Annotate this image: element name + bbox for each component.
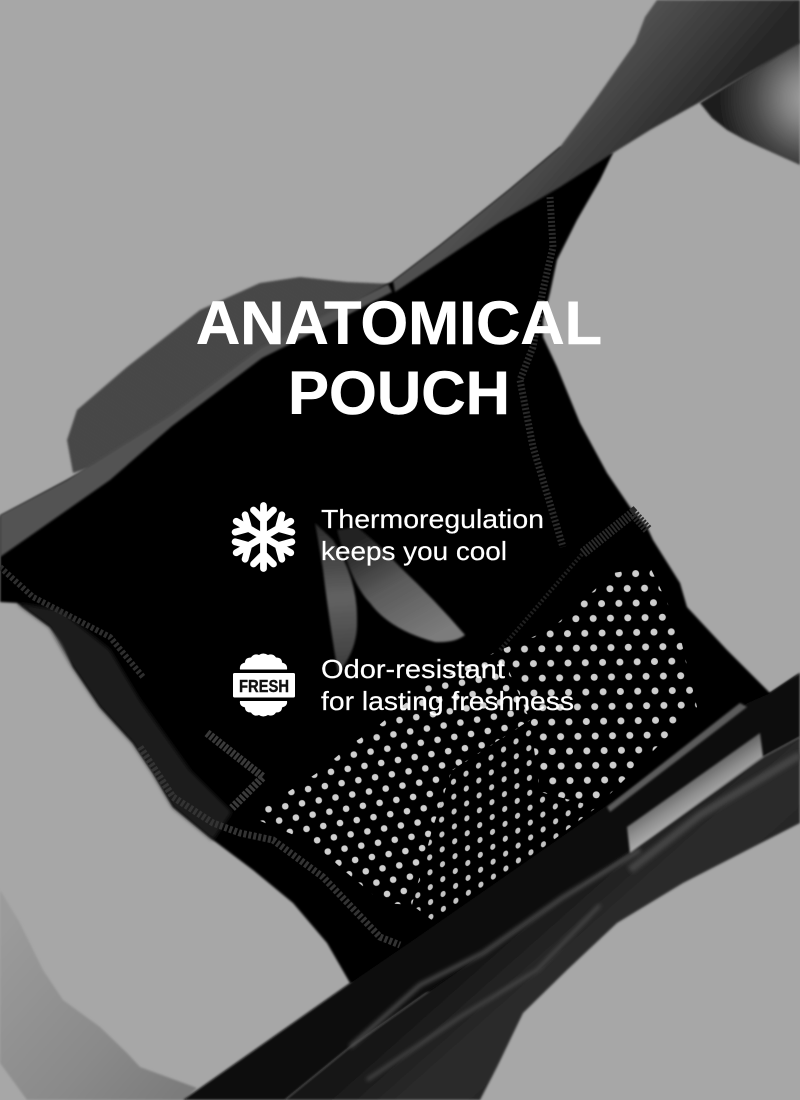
- text: thermoregulation: keeps you cool: [321, 536, 507, 566]
- upper waistband: [393, 0, 800, 292]
- text: odor-resistant: Odor-resistant: [321, 654, 506, 684]
- lower left arm: [0, 890, 197, 1100]
- feature: odor-resistant: [233, 654, 574, 716]
- icon: fresh badge: [233, 654, 295, 716]
- title: ANATOMICAL: [196, 289, 602, 357]
- text: odor-resistant: [321, 654, 574, 716]
- lower waistband: black band: [183, 673, 800, 1100]
- icon: snowflake: [231, 506, 296, 568]
- title: POUCH: [288, 359, 510, 427]
- title: [196, 289, 602, 427]
- waistband light strip: [0, 284, 392, 557]
- fabric highlights: [350, 755, 800, 1080]
- feature: thermoregulation: [231, 504, 544, 568]
- text: odor-resistant: for lasting freshness: [321, 686, 574, 716]
- text: thermoregulation: Thermoregulation: [321, 504, 544, 534]
- mesh panel with perforated dots: [260, 570, 697, 920]
- stitched seams: [0, 197, 648, 945]
- lower waistband: grey fabric: [285, 737, 800, 1100]
- icon: fresh badge: FRESH: [239, 676, 289, 696]
- black garment body: [0, 147, 800, 1000]
- text: thermoregulation: [321, 504, 544, 566]
- pouch opening: skin: [315, 523, 465, 673]
- waistband buckle highlight: [607, 703, 763, 853]
- upper right hand: [700, 40, 800, 165]
- lower left hem shading: [17, 603, 232, 840]
- ribbed back hump of the garment: [67, 277, 395, 473]
